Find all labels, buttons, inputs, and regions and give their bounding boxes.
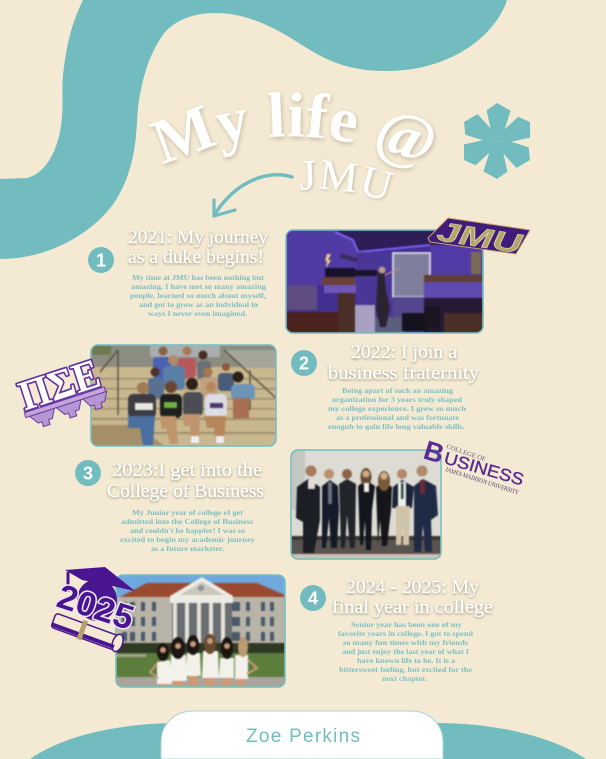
sticker: College of Business logo: JAMES MADISON UNIVERSITY — [444, 466, 520, 497]
sticker: College of Business logo — [420, 435, 526, 497]
body text 3: and couldn't be happier! I was so — [130, 526, 245, 535]
person 6 — [392, 480, 414, 508]
number badge 3 — [75, 460, 101, 486]
sticker: JMU logo — [428, 216, 530, 260]
section 2: 2022 — [291, 343, 480, 431]
heading 3: 2023:I get into the — [112, 461, 262, 481]
sticker: College of Business logo: USINESS — [442, 449, 526, 489]
heading 1: as a duke begins! — [128, 248, 264, 268]
body text 3: My Junior year of college eI get — [132, 508, 243, 517]
women — [157, 651, 248, 684]
body text 1: amazing. I have met so many amazing — [131, 282, 266, 291]
heading 3 — [107, 461, 264, 502]
icon: teal asterisk star — [456, 101, 538, 181]
section 3: 2023 — [75, 460, 264, 553]
body text 3: admitted into the College of Business — [121, 517, 253, 526]
heading 4: 2024 - 2025: My — [346, 578, 480, 598]
body text 2: my college experience. I grew so much — [328, 404, 467, 413]
front row — [128, 394, 156, 418]
body text 4: next chapter. — [382, 674, 427, 683]
body text 3: excited to begin my academic journey — [120, 535, 255, 544]
title: My life @: My life @ — [149, 92, 436, 172]
person 5 — [376, 482, 392, 546]
number badge 2 — [291, 350, 317, 376]
body text 3 — [120, 508, 255, 553]
body text 1: and got to grow as an indvidual in — [139, 300, 259, 309]
body text 4: so many fun times with my friends — [343, 638, 468, 647]
number badge 2: 2 — [299, 354, 309, 374]
number badge 1: 1 — [96, 250, 106, 270]
number badge 4 — [300, 585, 326, 611]
body text 2 — [328, 386, 467, 431]
sticker: College of Business logo: B — [420, 435, 448, 469]
heading 2: business fraternity — [328, 364, 480, 384]
heading 4 — [332, 578, 493, 618]
body text 3: as a future marketer. — [151, 544, 224, 553]
body text 4: Senior year has been one of my — [351, 620, 462, 629]
body text 4: favorite years in college. I got to spend — [338, 629, 474, 638]
person 1 — [296, 479, 320, 553]
body text 1: ways I never even imagined. — [148, 309, 247, 318]
number badge 3: 3 — [83, 464, 93, 484]
body text 2: enoguh to gain life long valuable skills. — [328, 422, 465, 431]
photo: fraternity group on steps — [91, 345, 276, 446]
person 7 — [414, 479, 438, 552]
number badge 1 — [88, 247, 114, 273]
heading 4: final year in college — [332, 598, 493, 618]
section 1: 2021 — [88, 228, 269, 318]
arrow: curved arrow from title to first section — [214, 175, 292, 216]
body text 1 — [130, 273, 266, 318]
sticker: Pi Sigma Epsilon letters: ΠΣΕ — [14, 351, 106, 420]
section 4: 2024 - 2025 — [300, 578, 493, 683]
body text 2: organization for 3 years truly shaped — [332, 395, 463, 404]
subtitle: JMU: JMU — [300, 160, 396, 201]
photo: dorm room with purple lights — [286, 230, 483, 333]
heading 2 — [328, 343, 480, 384]
body text 2: Being apart of such an amazing — [342, 386, 453, 395]
body text 1: My time at JMU has been nothing but — [132, 273, 264, 282]
body text 1: people, learned so much about myself, — [130, 291, 266, 300]
body text 4: have known life to be. It is a — [357, 656, 455, 665]
body text 4 — [338, 620, 474, 683]
footer name pill — [161, 711, 443, 759]
heading 2: 2022: I join a — [351, 343, 457, 363]
number badge 4: 4 — [308, 588, 318, 608]
person 2 — [322, 480, 339, 548]
footer name pill: Zoe Perkins — [246, 726, 360, 747]
photo: business students in suits — [291, 450, 441, 559]
decorative teal wave blob — [0, 0, 507, 259]
heading 3: College of Business — [107, 482, 264, 502]
sticker: JMU logo: JMU — [435, 216, 526, 260]
sticker: 2025 graduation cap and diploma: 2025 — [53, 577, 138, 638]
person 4 — [358, 480, 375, 550]
sticker: 2025 graduation cap and diploma — [50, 567, 138, 654]
person 3 — [339, 479, 356, 548]
middle row — [163, 366, 185, 390]
body text 2: as a professional and was fortunate — [336, 413, 460, 422]
heading 1: 2021: My journey — [128, 228, 269, 248]
body text 4: bittersweet feeling, but excited for the — [339, 665, 473, 674]
back row — [153, 357, 171, 379]
footer teal mound right — [430, 723, 586, 759]
sticker: College of Business logo: COLLEGE OF — [445, 443, 487, 463]
photo: university hall with women in white — [116, 575, 285, 687]
footer teal mound left — [30, 723, 175, 759]
body text 4: and just enjoy the last year of what I — [342, 647, 469, 656]
heading 1 — [128, 228, 269, 268]
